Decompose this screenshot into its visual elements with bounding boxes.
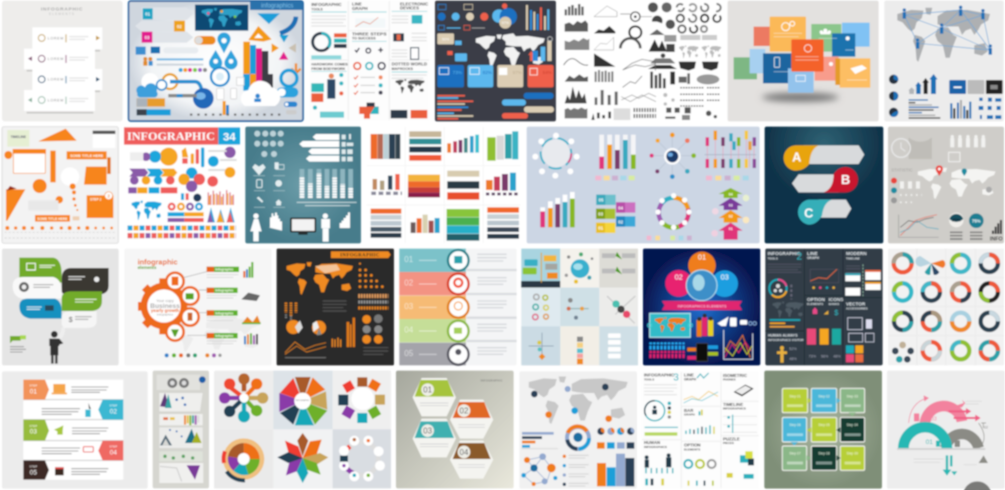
thumbnail: paper ribbon banners: [2, 1, 123, 121]
green label tags: Infographic: [215, 311, 234, 315]
thumbnail: semicircle arches with plane: [887, 371, 1005, 490]
gear: Business: [150, 303, 180, 310]
thumbnail: dark infographic with world map: 97%: [502, 21, 510, 25]
horizontal bars: [521, 432, 558, 449]
hexagon 03: 03: [423, 427, 433, 436]
thumbnail: infographic tools 1: THREE STEPS: [352, 31, 387, 37]
thumbnail: nine step grid: Step 01: [789, 394, 801, 398]
thumbnail: teal panel with white charts: [245, 127, 361, 243]
cloud with user: [241, 81, 280, 106]
ring diagram: [567, 426, 589, 449]
tube bar chart: [540, 192, 575, 227]
white arrow banners: [299, 134, 339, 162]
thumbnail: nine step grid: Step 04: [847, 423, 858, 427]
step row 1: [782, 388, 865, 413]
green label tags: Infographic: [215, 334, 234, 338]
thumbnail: nine step grid: Step 02: [818, 394, 830, 398]
thumbnail: paper ribbon banners: LOREM: [48, 78, 64, 82]
thumbnail: speech bubble leaves with person: $: [69, 315, 73, 324]
vertical bars: [599, 135, 636, 169]
column headings: [768, 251, 868, 342]
step 01: STEP: [29, 383, 37, 387]
thumbnail: pale blue flat infographic set: [527, 127, 760, 243]
step 04: 04: [110, 450, 117, 457]
column headings: INFOGRAPHICS VISITOR: [768, 338, 804, 342]
colour bands: 04: [404, 325, 414, 334]
numbered arrow labels: 01: [145, 12, 151, 17]
header bar: INFOGRAPHIC: [127, 129, 215, 143]
thumbnail: infographic tools 1: INFOGRAPHIC: [311, 2, 342, 7]
numbered arrow labels: [135, 7, 193, 43]
numbered arrow labels: 02: [177, 24, 182, 29]
hexagon 01: 01: [423, 386, 433, 395]
thumbnail: orange timeline elements: SOME TITLE HERE: [37, 217, 68, 221]
thumbnail: infographic tools 2 dark: [765, 249, 883, 365]
header bar: [124, 127, 240, 145]
thumbnail: infographic tools 2 dark: 2: [797, 252, 803, 263]
people rows: [649, 348, 685, 356]
decagon pie: INFOGRAPHIC: [296, 399, 310, 402]
thumbnail: paper ribbon banners: ELEMENTS: [49, 12, 75, 16]
column headings: ISOMETRIC: [723, 373, 747, 378]
thumbnail: grey statistics map: STATISTIC: [891, 168, 913, 173]
horizontal bars: [437, 96, 473, 119]
thumbnail: circular diagrams collage: [214, 371, 391, 488]
thumbnail: grey statistics map: [888, 127, 1004, 243]
numbered arrow labels: 03: [145, 35, 150, 40]
thumbnail: timeline collage grid: [521, 249, 638, 365]
colour bands: [399, 249, 466, 365]
thumbnail: speech bubble leaves with person: [2, 249, 119, 365]
three colour cards: [807, 329, 841, 345]
thumbnail: nine step grid: Step 03: [847, 394, 858, 398]
banner A: A: [792, 150, 801, 164]
thumbnail: paper ribbon banners: LOREM: [48, 98, 64, 102]
thumbnail: Infographic 34: [123, 127, 240, 243]
square ring: [338, 377, 385, 423]
icon tile strip: [128, 228, 236, 236]
line chart: [724, 330, 753, 359]
hexagon 02: 02: [460, 407, 469, 416]
column headings: TOOLS: [644, 377, 654, 381]
stacked arrows: 01: [729, 227, 733, 231]
pink ribbon: INFOGRAPHICS ELEMENTS: [677, 304, 727, 308]
column headings: GRAPH: [807, 256, 820, 260]
numbered circles and globe: 01: [698, 253, 706, 262]
gear: [138, 278, 187, 334]
thumbnail: 3D hexagons: INFOGRAPHIC: [481, 379, 503, 383]
column headings: GRAPH: [684, 378, 697, 382]
step tiles: [596, 195, 635, 233]
step 2 card: 2: [107, 193, 110, 198]
thumbnail: grey statistics map: INFO: [990, 237, 1003, 243]
gear: yearly growth: [151, 308, 179, 313]
thumbnail: blue technology infographic: [129, 1, 303, 121]
equalizer bar chart: [302, 169, 351, 198]
pie charts: [889, 75, 898, 117]
stacked arrows: 03: [729, 203, 733, 207]
thumbnail: infographic tools 3: 3: [673, 373, 679, 384]
lollipop columns: [705, 131, 756, 168]
header bar: 34: [223, 131, 236, 143]
thumbnail: grey map with bars: [519, 371, 637, 489]
column headings: HUMAN ALWAYS: [768, 334, 798, 338]
thumbnail: 3D hexagons: [396, 371, 514, 488]
thumbnail: paper ribbon banners: LOREM: [48, 37, 64, 41]
thumbnail: infographic tools 3: [642, 371, 759, 489]
column headings: BANKS: [829, 302, 839, 306]
step 01: 01: [30, 388, 37, 395]
step 02: [85, 400, 123, 420]
thumbnail: semicircle arches with plane: 03: [930, 417, 937, 423]
column headings: LINE: [684, 373, 694, 378]
percent cards: 64%: [543, 70, 552, 75]
stacked arrows: 04: [729, 193, 734, 197]
step 2 card: [87, 192, 113, 218]
numbered circles and globe: 03: [721, 272, 729, 281]
thumbnail: blue globe infographic: [643, 249, 760, 365]
thumbnail: infographic tools 1: ELECTRONIC: [400, 1, 428, 6]
column headings: VECTOR: [846, 301, 866, 306]
map panel: [648, 313, 692, 337]
percent cards: 82%: [483, 70, 492, 75]
step 04: STEP: [109, 445, 117, 449]
thumbnail: 3D coloured cubes: [728, 1, 879, 121]
percent dials: 25%: [952, 218, 961, 223]
thumbnail: paper ribbon banners: LOREM: [48, 57, 64, 61]
thumbnail: infographic tools 2 dark: 52%: [789, 347, 797, 351]
balloon flower: [219, 373, 268, 422]
step tiles: 05: [599, 198, 604, 203]
step row 3: [782, 446, 865, 470]
thumbnail: semicircle arches with plane: 01: [926, 439, 933, 446]
green label tags: [207, 267, 239, 338]
gear: Infographics: [157, 313, 174, 317]
column headings: INFOGRAPHIC: [644, 373, 674, 378]
column headings: OPTION: [807, 297, 825, 302]
segmented ring: [655, 193, 692, 230]
thumbnail: paper ribbon banners: INFOGRAPHIC: [41, 7, 83, 13]
step 05: [23, 460, 64, 480]
bubble ring: [339, 436, 385, 481]
step 02: STEP: [109, 404, 117, 408]
column headings: INFOGRAPHICS: [723, 407, 746, 411]
thumbnail: five step arrows: [2, 371, 148, 489]
step tiles: 01: [598, 226, 604, 231]
network graph: [521, 453, 557, 486]
person, bars and monitor: [250, 212, 350, 242]
heading: infographic: [138, 258, 178, 267]
thumbnail: infographic tools 2 dark: 48%: [789, 357, 797, 361]
thumbnail: infographic tools 1: TO SUCCESS: [352, 37, 376, 41]
thumbnail: infographic tools 1: DEVICES: [400, 6, 419, 11]
globe with pipe: [170, 82, 214, 109]
thumbnail: folded isometric map: [153, 371, 209, 488]
step 05: 05: [30, 469, 37, 476]
banner B: B: [841, 173, 850, 187]
column headings: OPTION: [684, 443, 701, 448]
thumbnail: infographic tools 1: MAPROCKS: [392, 67, 414, 71]
step 03: STEP: [29, 424, 37, 428]
stacked arrows: 02: [729, 214, 733, 218]
step 03: 03: [30, 429, 37, 436]
column headings: PUZZLE: [723, 436, 740, 441]
world map panel: [195, 5, 248, 31]
column headings: PIECES: [723, 441, 734, 445]
thumbnail: infographic tools 1: LINE: [352, 2, 362, 7]
thumbnail: semicircle arches with plane: 02: [984, 424, 989, 429]
thumbnail: infographic tools 1: TOOLS: [311, 7, 323, 11]
column headings: MODERN: [846, 251, 867, 256]
hexagon 04: 04: [460, 448, 469, 457]
step 04: [83, 441, 123, 460]
title banner: INFOGRAPHIC: [340, 253, 380, 258]
map pins: [891, 165, 992, 203]
title band: [250, 1, 303, 10]
column headings: TIMELINE: [723, 402, 743, 407]
percent cards: 97%: [513, 70, 522, 75]
numbered circles and globe: 02: [675, 272, 683, 281]
thumbnail: dark infographic with world map: 50%: [442, 37, 450, 41]
circle icons: [448, 250, 469, 365]
thumbnail: mini infographic set: [367, 127, 521, 243]
column headings: TOOLS: [768, 256, 778, 260]
thumbnail: dotted network map: [884, 1, 1004, 121]
orange title banner: SOME TITLE HERE: [70, 154, 104, 158]
decagon pie: [279, 377, 327, 425]
thumbnail: circular diagrams grid: [888, 249, 1004, 365]
percent cards: 73%: [453, 70, 462, 75]
heading: elements: [138, 265, 157, 270]
thumbnail: nine step grid: Step 05: [818, 423, 830, 427]
presenter figure: [49, 331, 63, 364]
step 01: [23, 380, 67, 400]
bar charts column: [564, 4, 589, 118]
thumbnail: grey chart collection: [562, 1, 722, 121]
petal ring: [532, 133, 580, 179]
banner C: C: [804, 206, 813, 220]
percent dials: [949, 213, 984, 228]
thumbnail: infographic tools 2 dark: 48%: [833, 355, 841, 359]
thumbnail: nine step grid: [764, 371, 882, 489]
step 2 card: STEP 2: [90, 198, 102, 202]
thumbnail: infographic tools 1: FROM BODYWORK: [311, 67, 346, 71]
map markers: [531, 384, 612, 422]
thumbnail: infographic tools 1: DOTTED WORLD: [392, 62, 427, 67]
column headings: ICONS: [829, 297, 843, 302]
step tiles: 03: [598, 212, 604, 217]
pie charts: [286, 320, 326, 335]
column headings: [644, 373, 747, 451]
column headings: ELEMENTS: [807, 302, 823, 306]
thumbnail: nine step grid: Step 09: [847, 452, 858, 456]
thumbnail: infographic tools 2 dark: 56%: [821, 355, 829, 359]
thumbnail: nine step grid: Step 06: [789, 423, 801, 427]
colour bands: 03: [404, 302, 414, 311]
step 03: [23, 420, 63, 441]
column headings: TIMELINE: [846, 256, 860, 260]
colour bands: 05: [404, 349, 414, 358]
step tiles: 04: [618, 205, 624, 210]
thumbnail: nine step grid: Step 08: [818, 452, 830, 456]
thumbnail: orange timeline elements: [2, 127, 118, 243]
column chart: [597, 454, 634, 486]
column chart: [526, 5, 549, 30]
colour tubes: [697, 314, 713, 337]
map silhouettes: [679, 45, 721, 84]
green label tags: Infographic: [215, 268, 234, 272]
column headings: PHONES: [723, 378, 736, 382]
column headings: HUMAN: [644, 440, 660, 445]
segmented pie: [223, 438, 264, 480]
step row 2: [782, 417, 865, 442]
thumbnail: infographic tools 1: [309, 1, 429, 121]
stacked colour bars: [243, 42, 273, 91]
network lines: [904, 10, 990, 50]
thumbnail: orange timeline elements: TIMELINE: [11, 135, 27, 139]
step 02: 02: [110, 409, 117, 416]
thumbnail: business gear: [124, 249, 272, 365]
column headings: ACCESSORIES: [846, 306, 868, 310]
line chart: [899, 215, 939, 237]
thumbnail: nine step grid: Step 07: [789, 452, 801, 456]
green label tags: Infographic: [215, 289, 234, 293]
column headings: GRAPH: [684, 413, 695, 417]
percent dials: 75%: [972, 218, 981, 223]
flower chart: [178, 167, 205, 192]
colour bands: 01: [404, 255, 414, 264]
thumbnail: infographic tools 2 dark: $: [834, 308, 838, 317]
column chart: [332, 338, 341, 347]
thumbnail: infographic tools 2 dark: 73%: [809, 355, 817, 359]
gear: Your copy: [156, 298, 174, 303]
thumbnail: infographic tools 1: HARDWORK COMES: [311, 63, 348, 67]
pinwheel leaves: [277, 433, 328, 483]
thumbnail: dark infographic with world map: [435, 1, 556, 121]
globe hub: [650, 133, 696, 179]
colour bands: 02: [404, 278, 414, 287]
column headings: BAR: [684, 408, 694, 413]
percent cards: [437, 65, 554, 87]
numbered circles and globe: [665, 252, 738, 301]
thumbnail: infographic tools 1: GRAPH: [352, 6, 368, 11]
column headings: LINE: [807, 251, 818, 256]
column headings: ELEMENTS: [684, 447, 700, 451]
thumbnail: A B C banners: [765, 127, 883, 243]
step 05: STEP: [29, 464, 37, 468]
thumbnail: five numbered bands: [399, 249, 517, 365]
stacked arrows: [719, 188, 743, 240]
person icon: [327, 73, 335, 99]
step tiles: 02: [618, 219, 624, 224]
title band: infographics: [261, 3, 293, 9]
thumbnail: dark chalkboard infographic: [277, 249, 394, 365]
column headings: INFOGRAPHICS: [644, 445, 667, 449]
column headings: INFOGRAPHIC: [768, 251, 801, 256]
petals diagram: [915, 256, 945, 275]
